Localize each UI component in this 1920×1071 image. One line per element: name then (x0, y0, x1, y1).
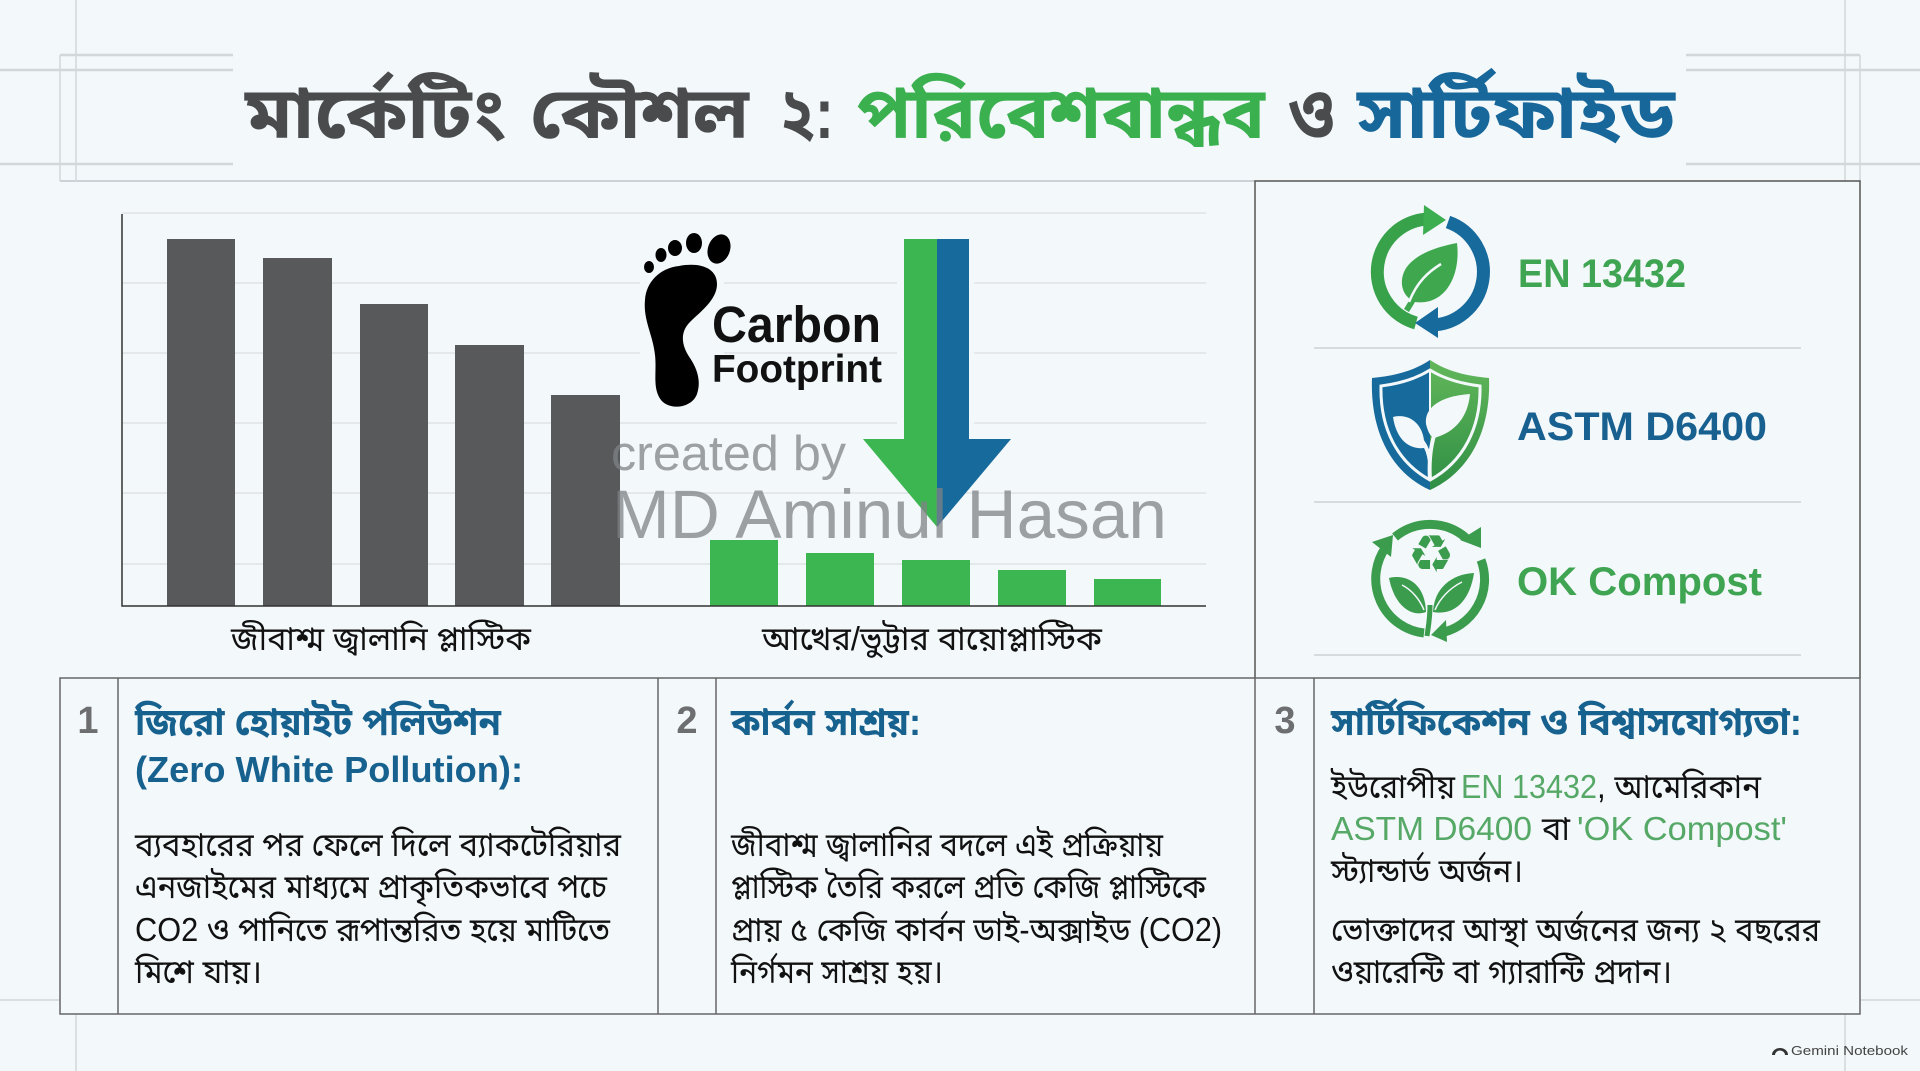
arrow: carbon reduction (863, 239, 1011, 527)
body text 3: ইউরোপীয় (1330, 767, 1455, 805)
body text 2: প্রায় ৫ কেজি কার্বন ডাই-অক্সাইড (CO2) (731, 910, 1222, 948)
body text 1: মিশে যায়। (134, 952, 262, 990)
icon: carbon footprint: Footprint (712, 348, 882, 391)
title: কৌশল (530, 71, 751, 154)
body text 3: 'OK Compost' (1577, 810, 1787, 847)
heading 2: কার্বন সাশ্রয়: (730, 700, 921, 744)
text: EN 13432: EN 13432 (1518, 252, 1686, 296)
icon: carbon footprint: Carbon (712, 296, 881, 353)
chart label: fossil plastic: জীবাশ্ম জ্বালানি প্লাস্টিক (230, 619, 531, 657)
title (244, 67, 1676, 154)
body text 3: বা (1541, 810, 1571, 847)
bars: fossil plastic (167, 239, 620, 606)
icon: carbon footprint (644, 231, 882, 407)
chart label: bioplastic: আখের/ভুট্টার বায়োপ্লাস্টিক (761, 619, 1102, 658)
title: ও (1288, 74, 1335, 154)
number 2: 2 (676, 700, 698, 742)
credit: Gemini Notebook: Gemini Notebook (1791, 1043, 1909, 1058)
heading 1: (Zero White Pollution): (135, 749, 523, 790)
body text 3: ASTM D6400 (1331, 810, 1532, 847)
bars: bioplastic (710, 540, 1161, 606)
heading 1: জিরো হোয়াইট পলিউশন (134, 700, 502, 744)
title: ২: (780, 74, 834, 154)
icon: OK Compost: ♻ (1408, 525, 1454, 585)
title: সার্টিফাইড (1356, 67, 1676, 154)
watermark (611, 427, 1167, 553)
body text 3: ওয়ারেন্টি বা গ্যারান্টি প্রদান। (1331, 952, 1672, 990)
number 1: 1 (77, 700, 99, 742)
body text 2: প্লাস্টিক তৈরি করলে প্রতি কেজি প্লাস্টিকে (731, 867, 1206, 905)
text: ASTM D6400: ASTM D6400 (1517, 405, 1767, 449)
panel: certifications (1255, 181, 1860, 678)
icon: EN 13432 (1377, 205, 1483, 338)
panel: certification and trust (1274, 698, 1820, 990)
bar chart (122, 213, 1206, 606)
heading 1 (134, 700, 523, 790)
number 3: 3 (1274, 700, 1296, 742)
body text 3: EN 13432 (1461, 768, 1597, 805)
panel: zero white pollution (77, 700, 621, 990)
body text 3: স্ট্যান্ডার্ড অর্জন। (1330, 851, 1523, 889)
watermark: created by (611, 427, 847, 481)
body text 1 (134, 825, 621, 990)
panel: carbon saving (676, 700, 1222, 990)
body text 2: নির্গমন সাশ্রয় হয়। (730, 952, 943, 990)
body text 3: ভোক্তাদের আস্থা অর্জনের জন্য ২ বছরের (1331, 910, 1820, 948)
heading 3: সার্টিফিকেশন ও বিশ্বাসযোগ্যতা: (1330, 698, 1802, 744)
body text 2 (730, 825, 1222, 990)
body text 2: জীবাশ্ম জ্বালানির বদলে এই প্রক্রিয়ায় (730, 825, 1163, 863)
watermark: MD Aminul Hasan (612, 476, 1167, 553)
panel: bottom table (60, 678, 1860, 1014)
body text 1: ব্যবহারের পর ফেলে দিলে ব্যাকটেরিয়ার (134, 825, 621, 863)
body text 1: CO2 ও পানিতে রূপান্তরিত হয়ে মাটিতে (135, 910, 611, 948)
icon: OK Compost (1372, 524, 1485, 642)
title: মার্কেটিং (244, 70, 506, 154)
body text 3 (1330, 767, 1820, 990)
body text 3: , আমেরিকান (1597, 767, 1762, 805)
text: OK Compost: OK Compost (1517, 560, 1762, 604)
title: পরিবেশবান্ধব (857, 72, 1267, 154)
icon: ASTM D6400 (1372, 360, 1489, 490)
body text 1: এনজাইমের মাধ্যমে প্রাকৃতিকভাবে পচে (135, 867, 608, 908)
